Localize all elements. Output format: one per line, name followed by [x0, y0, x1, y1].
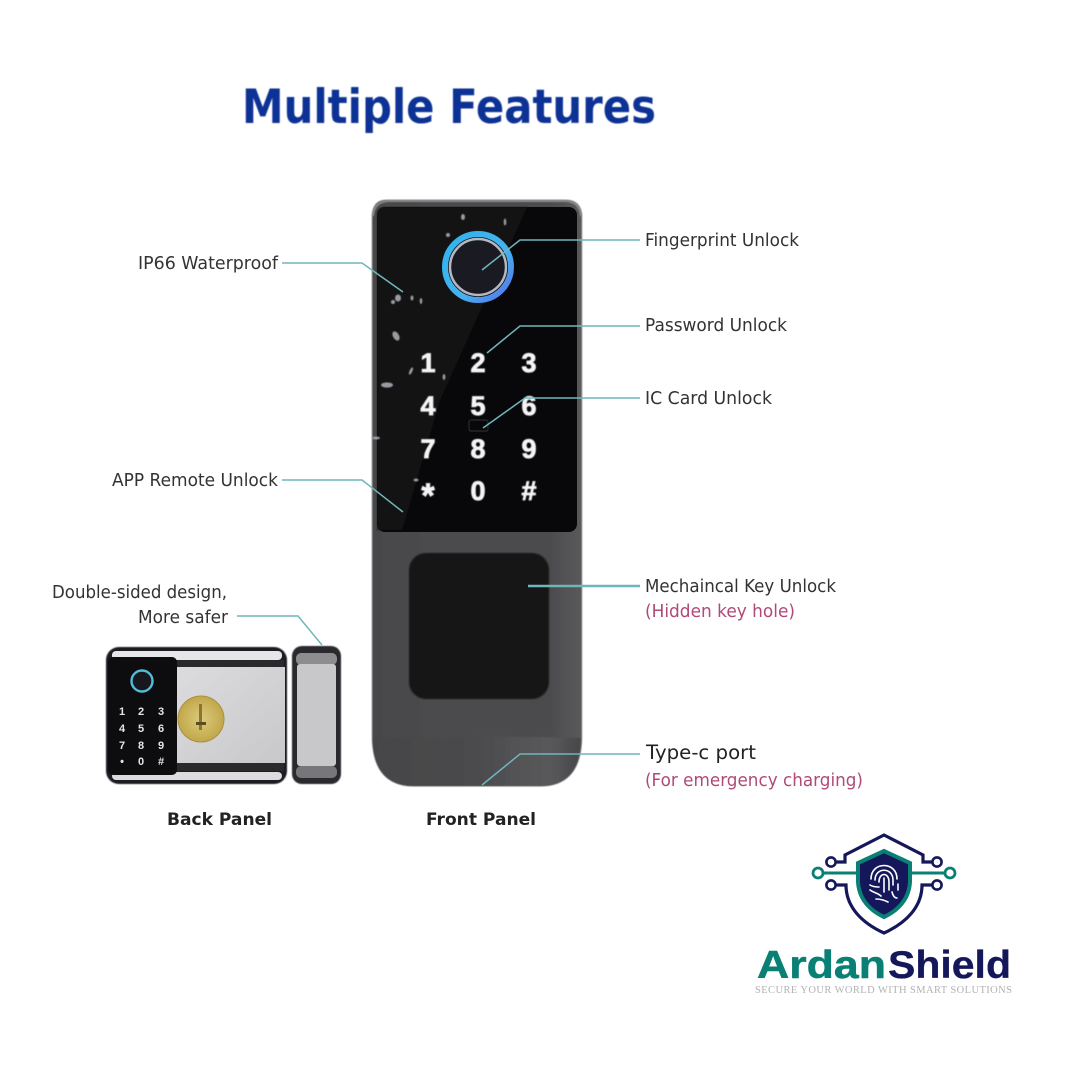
keypad digits: 2 — [470, 348, 486, 378]
keypad digits: 1 — [420, 348, 436, 378]
back keypad: 9 — [158, 740, 164, 752]
label: front panel: Front Panel — [426, 810, 536, 830]
case highlight — [112, 651, 282, 660]
brand name: Ardan — [757, 944, 886, 987]
front panel lock — [372, 200, 582, 786]
label: mechanical key unlock: Mechaincal Key Unlock — [645, 576, 837, 597]
label: type-c port: Type-c port — [645, 741, 756, 764]
label: double-sided design: Double-sided design, — [52, 582, 227, 603]
logo — [755, 835, 1012, 996]
back keypad: 8 — [138, 740, 144, 752]
keypad digits: # — [521, 476, 537, 506]
label: IC card unlock: IC Card Unlock — [645, 388, 773, 409]
fingerprint sensor — [445, 234, 511, 300]
leader: app remote — [282, 480, 403, 512]
water drops — [372, 214, 506, 482]
back keypad: 0 — [138, 756, 144, 768]
keypad digits: 3 — [521, 348, 537, 378]
label: app remote unlock: APP Remote Unlock — [112, 470, 279, 491]
circuit nodes — [826, 857, 836, 867]
keypad digits: 0 — [470, 476, 486, 506]
keyed cylinder — [178, 696, 224, 742]
label: waterproof: IP66 Waterproof — [138, 253, 279, 274]
back keypad — [108, 657, 177, 775]
leader: type-c — [482, 754, 640, 785]
leader: double-sided — [237, 616, 322, 645]
back keypad: 3 — [158, 706, 164, 718]
feature labels — [52, 230, 863, 830]
title: Multiple Features — [242, 80, 656, 135]
back panel lock — [106, 646, 341, 784]
tagline: SECURE YOUR WORLD WITH SMART SOLUTIONS — [755, 985, 1012, 996]
back keypad: 4 — [119, 723, 126, 735]
fingerprint — [870, 866, 898, 902]
label: back panel: Back Panel — [167, 810, 272, 830]
keypad digits: 5 — [470, 391, 486, 421]
keypad digits: 8 — [470, 434, 486, 464]
back keypad: 5 — [138, 723, 144, 735]
back keypad: # — [158, 756, 164, 768]
back keypad: 1 — [119, 706, 125, 718]
keypad digits: 4 — [420, 391, 436, 421]
keypad digits: 9 — [521, 434, 537, 464]
label: emergency charging: (For emergency charging) — [645, 770, 863, 791]
leader lines — [237, 240, 640, 785]
black touch panel — [377, 207, 577, 532]
leader: mechanical key — [528, 585, 640, 587]
label: fingerprint unlock: Fingerprint Unlock — [645, 230, 800, 251]
panel sheen — [377, 207, 527, 530]
keypad digits: 6 — [521, 391, 537, 421]
top bezel highlight — [373, 201, 581, 216]
logo: Shield — [888, 944, 1011, 987]
lock body — [372, 200, 582, 786]
keypad digits: * — [421, 477, 435, 515]
logo mark — [813, 835, 955, 933]
keypad digits — [420, 348, 537, 515]
label: hidden key hole: (Hidden key hole) — [645, 601, 795, 622]
label: more safer: More safer — [138, 607, 229, 628]
keypad digits: 7 — [420, 434, 436, 464]
leader: IC card — [483, 398, 640, 428]
label: password unlock: Password Unlock — [645, 315, 788, 336]
steel plate — [176, 667, 285, 763]
back keypad: • — [120, 756, 124, 768]
inner shield — [858, 851, 910, 917]
outer shield — [826, 835, 942, 862]
side handle — [292, 646, 341, 784]
leader: fingerprint — [482, 240, 640, 270]
card reader mark — [469, 420, 488, 431]
back keypad: 7 — [119, 740, 125, 752]
back keypad: 6 — [158, 723, 164, 735]
bottom lip — [373, 736, 581, 786]
leader: waterproof — [282, 263, 403, 292]
lock case — [106, 647, 287, 784]
leader: password — [487, 326, 640, 353]
back keypad: 2 — [138, 706, 144, 718]
key cover — [409, 553, 549, 699]
